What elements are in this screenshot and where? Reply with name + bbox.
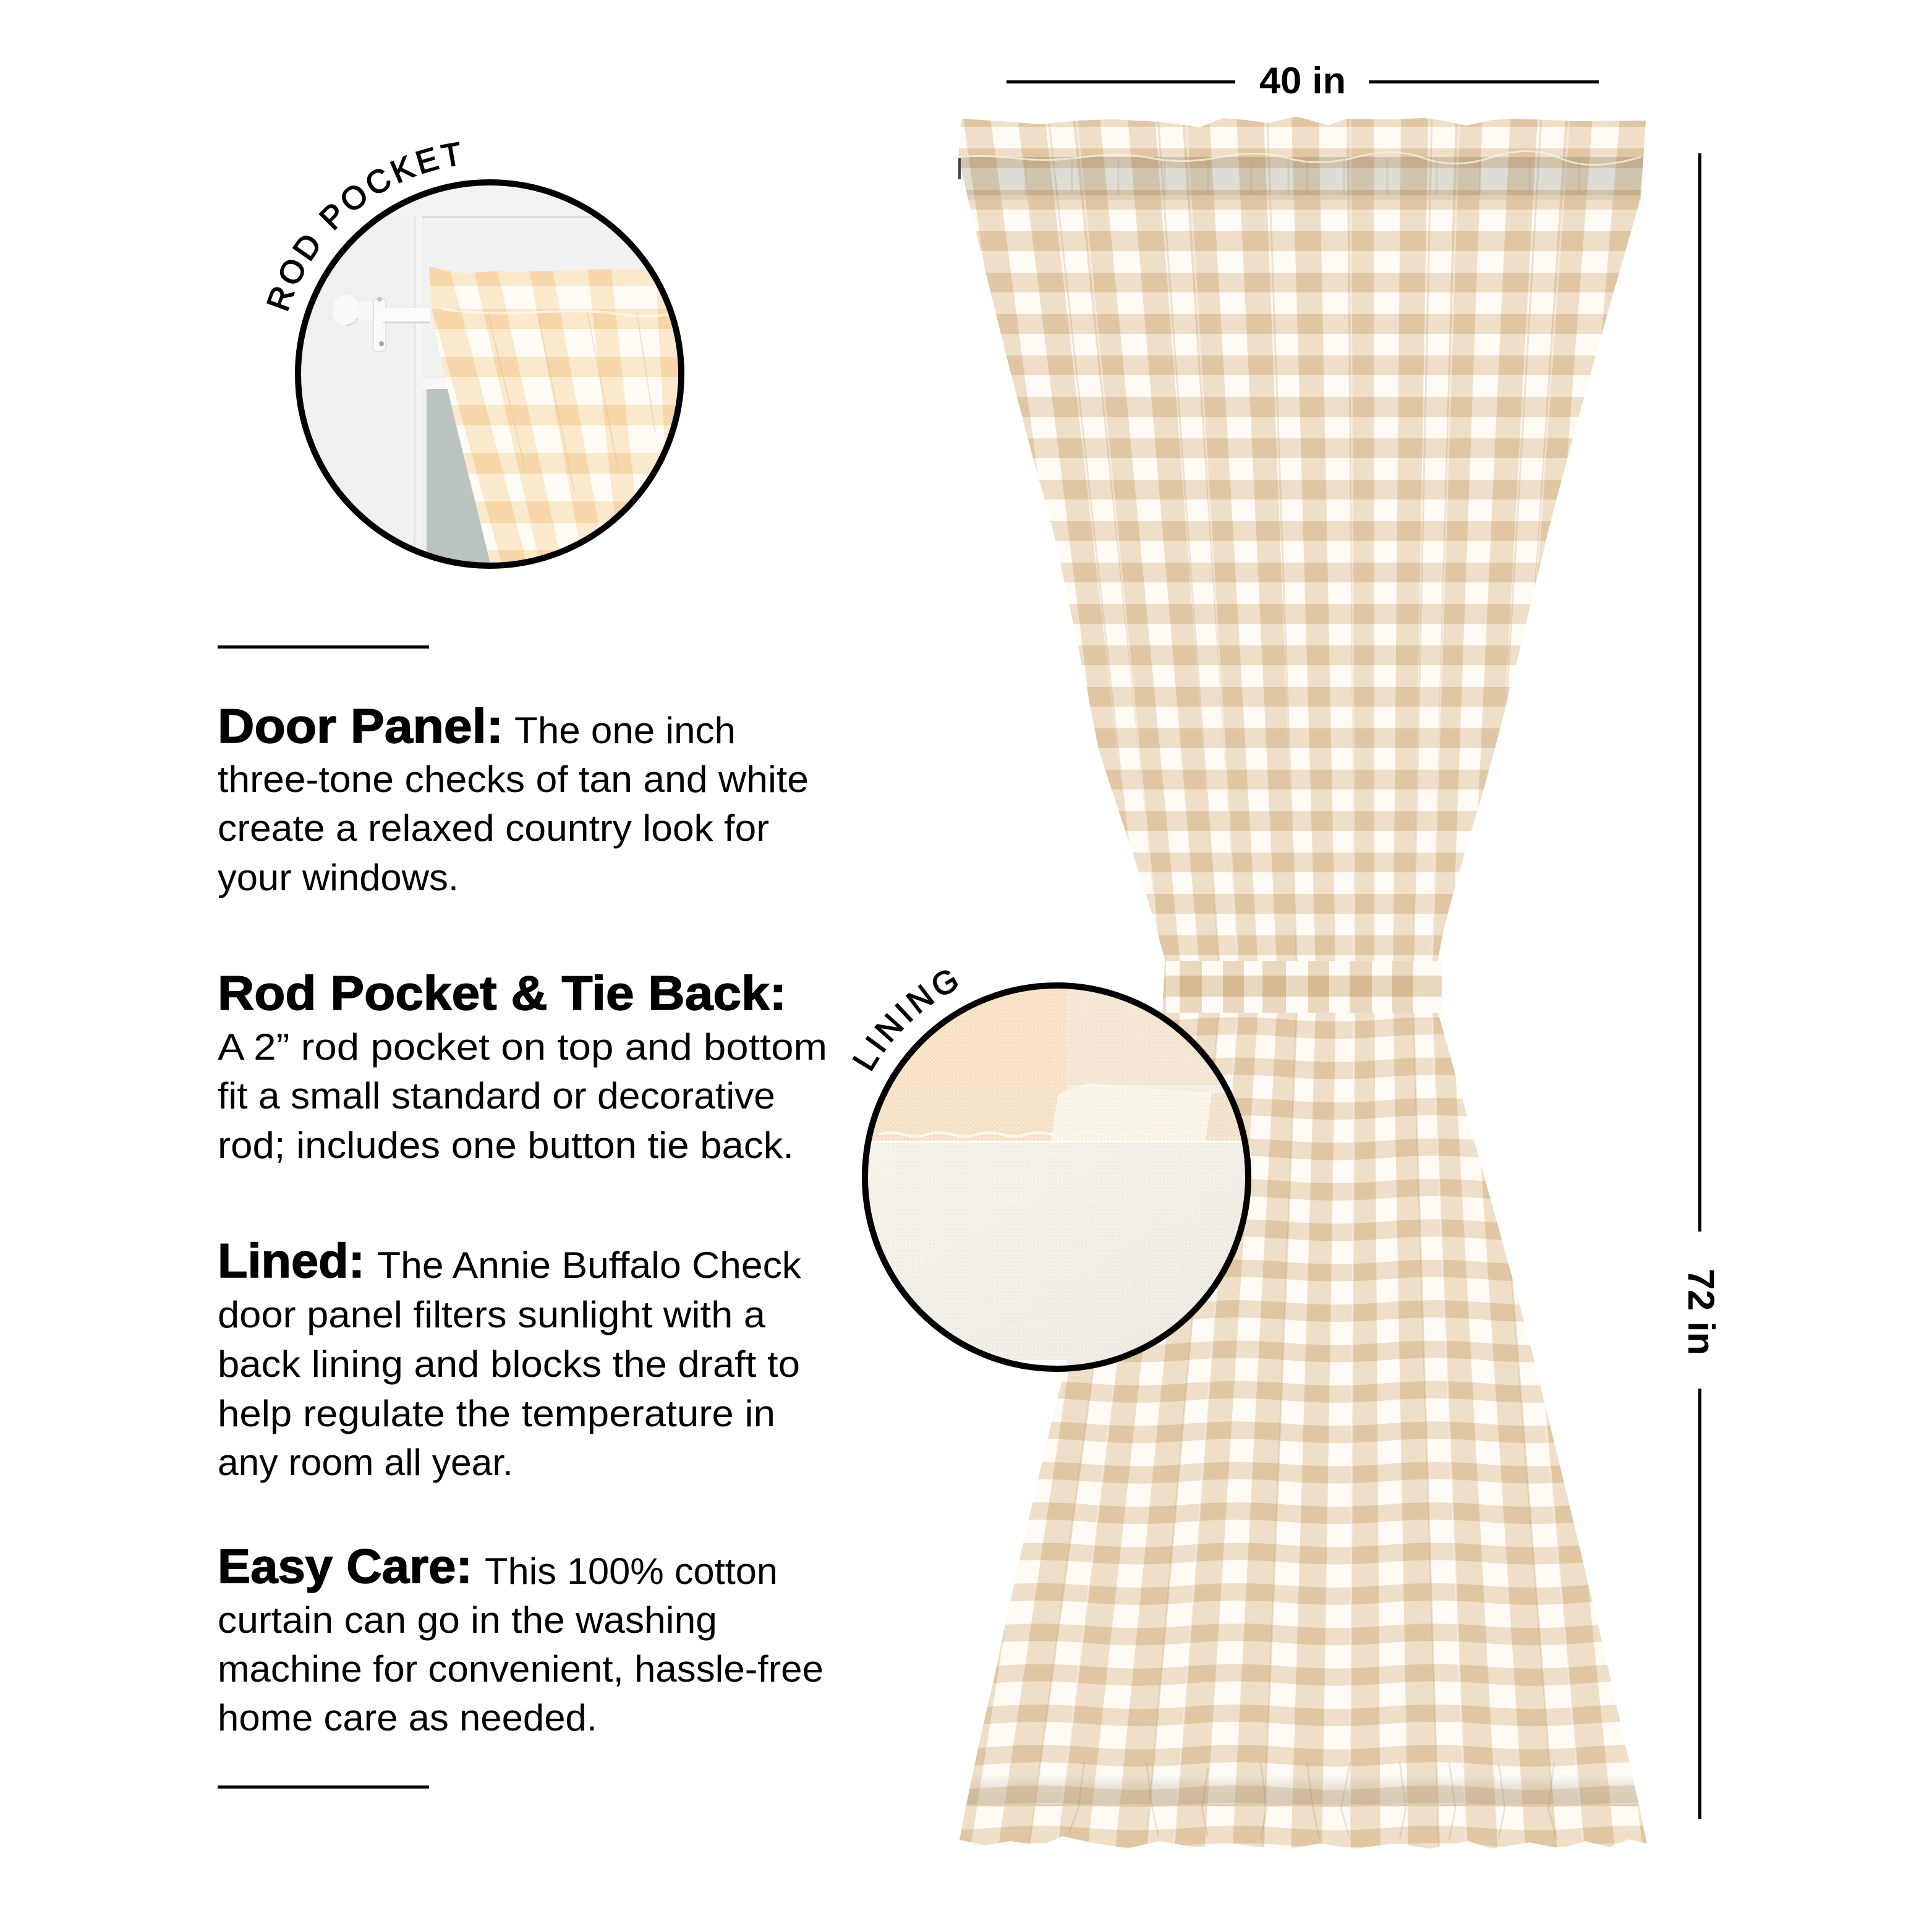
text block: door panel: your windows. [218,857,459,898]
tie back band [1166,961,1442,1013]
heading: door panel: Door Panel: [218,699,503,753]
height label: 72 in [1680,1269,1722,1355]
text block: easy care: This 100% cotton [485,1551,778,1592]
text block: door panel: The one inch [514,710,736,751]
callout: lining [852,971,1251,1372]
dimension: height 72 in [1680,153,1722,1819]
text block: easy care [218,1539,823,1738]
text block: lined: any room all year. [218,1442,513,1483]
text block: lined [218,1233,802,1483]
heading: rod pocket and tie back: Rod Pocket & Tie Back: [218,966,786,1020]
callout: rod pocket [266,142,684,569]
bottom rod pocket band [955,1762,1653,1839]
text block: lined: back lining and blocks the draft to [218,1343,800,1385]
text block: door panel: three-tone checks of tan and white [218,759,809,800]
text block: easy care: curtain can go in the washing [218,1599,717,1641]
text block: easy care: machine for convenient, hassle-free [218,1648,823,1690]
heading: lined: Lined: [218,1233,365,1288]
heading: easy care: Easy Care: [218,1539,472,1593]
left rod stub [958,158,961,179]
main curtain photo [958,116,1647,1850]
text block: lined: The Annie Buffalo Check [377,1245,802,1286]
text block: easy care: home care as needed. [218,1697,597,1738]
text block: door panel [218,699,809,898]
circle photo: rod pocket detail [291,173,699,581]
top divider [218,645,429,649]
text block: door panel: create a relaxed country look for [218,807,769,849]
text block: rod pocket and tie back: A 2” rod pocket on top and bottom [218,1026,827,1068]
text block: lined: help regulate the temperature in [218,1393,775,1434]
dimension: width 40 in [1006,60,1599,101]
text block: lined: door panel filters sunlight with a [218,1294,766,1335]
text block: rod pocket and tie back [218,966,827,1166]
text block: rod pocket and tie back: fit a small standard or decorative [218,1075,775,1117]
text block: rod pocket and tie back: rod; includes one button tie back. [218,1125,794,1166]
circular label: LINING: LINING [852,971,958,1071]
circle photo: lining detail [859,980,1261,1377]
curtain detail [429,266,678,563]
circular label: ROD POCKET: ROD POCKET [266,142,460,312]
bottom divider [218,1785,429,1789]
top rod pocket band [955,151,1648,200]
width label: 40 in [1259,60,1346,101]
curtain rod and bracket [333,295,430,351]
